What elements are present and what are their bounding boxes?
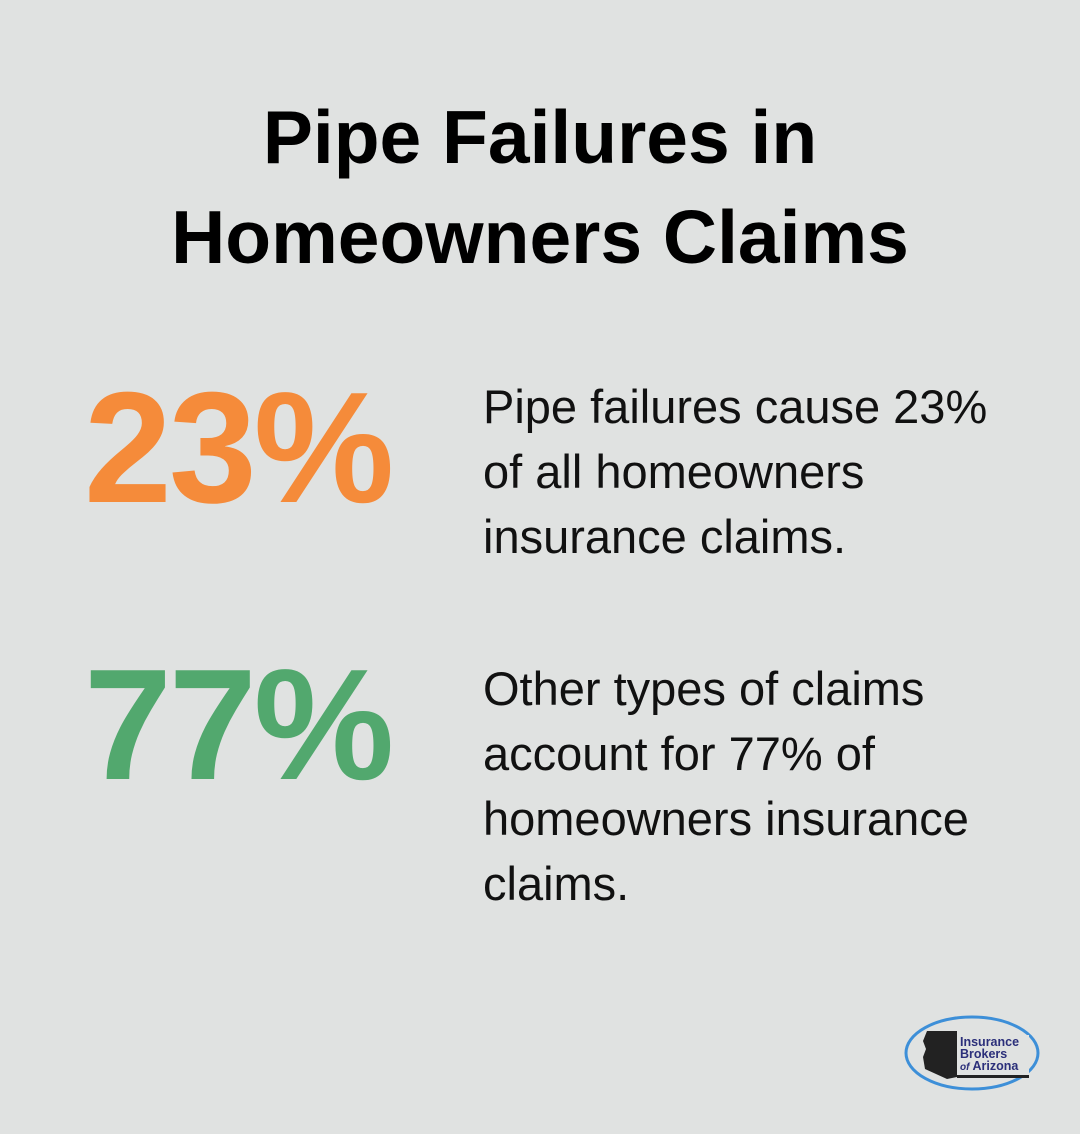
- stat: 77%: 77%: [84, 637, 391, 813]
- text: pipe failures: [483, 380, 987, 563]
- text: pipe failures: insurance claims.: [483, 510, 846, 563]
- logo: of Arizona: [960, 1059, 1019, 1073]
- text: other claims: [483, 662, 969, 910]
- logo: [904, 1016, 1040, 1090]
- text: other claims: account for 77% of: [483, 727, 875, 780]
- logo: Brokers: [960, 1047, 1007, 1061]
- text: other claims: homeowners insurance: [483, 792, 969, 845]
- title: Homeowners Claims: [171, 195, 909, 279]
- title: Pipe Failures in: [263, 95, 817, 179]
- text: other claims: Other types of claims: [483, 662, 924, 715]
- stat: 23%: 23%: [84, 360, 391, 536]
- text: other claims: claims.: [483, 857, 629, 910]
- text: pipe failures: Pipe failures cause 23%: [483, 380, 987, 433]
- title: [171, 95, 909, 279]
- logo: Insurance: [960, 1035, 1019, 1049]
- text: pipe failures: of all homeowners: [483, 445, 864, 498]
